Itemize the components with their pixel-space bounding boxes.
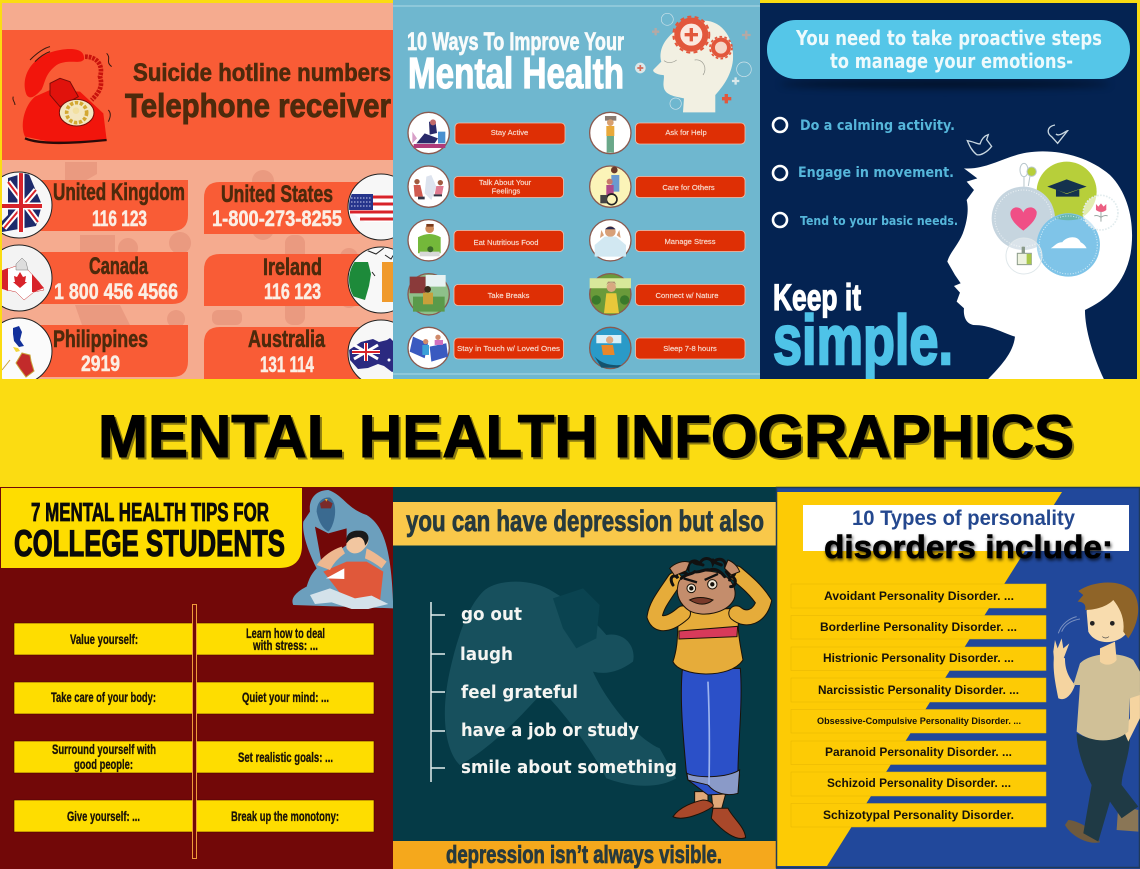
illustration: waving man (1053, 583, 1140, 843)
tips list labels: Feelings (492, 186, 521, 196)
panel: tips for college students (0, 487, 393, 869)
background telephone pattern (65, 162, 358, 328)
tip labels: good people: (74, 756, 133, 772)
heading: simple.: simple. (773, 301, 953, 379)
icon: sleep 7-8 hours (590, 327, 631, 369)
hair curls (671, 559, 735, 587)
card: United States: 1-800-273-8255 (212, 206, 342, 231)
disorder labels (817, 589, 1021, 822)
icon: talk about your feelings (408, 166, 449, 207)
list items: feel grateful (461, 682, 578, 703)
icon: Canada flag map (0, 245, 52, 311)
disorder labels: Paranoid Personality Disorder. ... (825, 745, 1012, 759)
tips list labels: Talk About Your (479, 178, 532, 187)
header band (2, 30, 393, 160)
disorder labels: Histrionic Personality Disorder. ... (823, 651, 1014, 665)
footer text: depression isn’t always visible. (446, 841, 722, 869)
bullet: movement: Engage in movement. (798, 165, 954, 181)
icon: head with gears (635, 13, 751, 112)
tips list labels: Eat Nutritious Food (474, 238, 538, 247)
icon: stay active (408, 112, 449, 154)
card: United Kingdom: 116 123 (92, 206, 147, 231)
icon: Ireland map (348, 246, 393, 314)
card: Philippines (40, 325, 188, 377)
tip labels: Learn how to deal (246, 625, 325, 641)
disorder labels: Obsessive-Compulsive Personality Disorder. ... (817, 716, 1021, 727)
bottom band (393, 841, 776, 869)
icon: US flag map (348, 174, 393, 240)
banner title (0, 379, 1140, 487)
icon: red rotary telephone (13, 47, 112, 143)
card: Australia (204, 326, 360, 380)
panel: suicide hotline numbers (0, 3, 415, 386)
panel: proactive steps to manage emotions (760, 3, 1137, 379)
heading: 10 types of personality: 10 Types of personality (852, 507, 1075, 530)
icon: cloud circle (1037, 213, 1100, 277)
panel: depression isn't always visible (393, 487, 776, 869)
list connector (431, 602, 445, 782)
frame (776, 488, 1140, 868)
heading: 7 mental health tips for: 7 MENTAL HEALTH TIPS FOR (31, 497, 269, 527)
icon: connect with nature (590, 274, 631, 315)
card: Australia: 131 114 (260, 352, 315, 377)
header tab (1, 488, 302, 568)
tips list labels: Stay in Touch w/ Loved Ones (457, 344, 560, 353)
icon: care for others (590, 166, 631, 207)
panel: 10 types of personality disorders (776, 487, 1140, 869)
icon: Philippines map (0, 318, 52, 384)
tips list labels: Stay Active (491, 128, 528, 137)
tip labels: Take care of your body: (51, 689, 156, 705)
disorder labels: Schizoid Personality Disorder. ... (827, 776, 1011, 790)
header pill shadow (780, 80, 1110, 88)
tip labels (51, 625, 339, 824)
header pill (767, 20, 1130, 79)
tips list labels: Ask for Help (665, 128, 707, 137)
tip labels: Quiet your mind: ... (242, 689, 329, 705)
icon: thumbs up (1006, 238, 1042, 274)
list items: go out (461, 604, 522, 625)
card: Ireland (204, 254, 360, 306)
yellow diagonal background (777, 492, 1062, 866)
header pill: to manage your emotions- (830, 49, 1073, 73)
card: Ireland: 116 123 (264, 279, 321, 304)
illustration: stressed student with shadow (292, 490, 393, 609)
icon: UK flag map (0, 172, 52, 238)
bullet: calming activity: Do a calming activity. (800, 118, 955, 134)
card: United Kingdom (40, 179, 188, 231)
heading: disorders include: disorders include: (824, 529, 1113, 565)
illustration: worried boy (655, 559, 764, 839)
tips list labels: Take Breaks (488, 291, 530, 300)
card: Canada (40, 252, 188, 304)
icon: stay in touch (408, 327, 449, 369)
tips list labels: Connect w/ Nature (656, 291, 718, 300)
heading: keep it: Keep it (773, 277, 861, 318)
card: Canada: Canada (89, 253, 148, 280)
tips list icons (408, 112, 631, 369)
tips list labels: Sleep 7-8 hours (663, 344, 717, 353)
card: United States (204, 181, 360, 234)
tip rows (14, 623, 374, 832)
disorder rows (791, 584, 1046, 827)
center divider (192, 604, 196, 858)
list items: smile about something (461, 757, 677, 778)
icon: manage stress (590, 220, 631, 261)
icon: take breaks (408, 274, 449, 315)
card: Philippines: 2919 (81, 351, 120, 376)
card: Ireland: Ireland (263, 254, 322, 281)
header white box (803, 505, 1129, 551)
tips list labels: Manage Stress (664, 237, 716, 246)
list items: have a job or study (461, 720, 639, 741)
tip labels: Value yourself: (70, 631, 138, 647)
list items (460, 604, 677, 778)
heading: college students: COLLEGE STUDENTS (14, 523, 285, 564)
icon: bird (967, 135, 992, 155)
tip labels: Give yourself: ... (67, 808, 140, 824)
icon: heart circle (992, 187, 1055, 250)
card: Canada: 1 800 456 4566 (54, 279, 178, 304)
tips list labels: Care for Others (662, 183, 715, 192)
card: United Kingdom: United Kingdom (53, 179, 185, 206)
banner title: MENTAL HEALTH INFOGRAPHICS (100, 405, 1076, 472)
list items: laugh (460, 644, 513, 665)
heading: telephone receiver: Telephone receiver (125, 87, 391, 124)
tips list labels (457, 128, 718, 353)
disorder labels: Narcissistic Personality Disorder. ... (818, 683, 1019, 697)
panel: 10 ways to improve your mental health (393, 0, 760, 379)
icon: balloons (1020, 163, 1036, 187)
card: Australia: Australia (248, 326, 325, 353)
icon: heart outline (1048, 125, 1068, 143)
icon: ask for help (590, 112, 631, 154)
card: Philippines: Philippines (53, 326, 148, 353)
top band (393, 502, 776, 546)
banner title: MENTAL HEALTH INFOGRAPHICS (98, 403, 1074, 470)
tips list buttons (454, 123, 745, 359)
icon: flower gear (1083, 195, 1118, 230)
disorder labels: Borderline Personality Disorder. ... (820, 620, 1017, 634)
heading: mental health: Mental Health (408, 49, 624, 98)
disorder labels: Schizotypal Personality Disorder. (823, 808, 1014, 822)
tip labels: with stress: ... (252, 637, 318, 653)
tip labels: Set realistic goals: ... (238, 749, 333, 765)
disorder labels: Avoidant Personality Disorder. ... (824, 589, 1014, 603)
card: United States: United States (221, 181, 333, 208)
icon: eat nutritious food (408, 220, 449, 261)
icon: Australia flag map (348, 320, 393, 379)
heading: suicide hotline numbers: Suicide hotline numbers (133, 59, 391, 87)
tip labels: Break up the monotony: (231, 808, 339, 824)
illustration: child head silhouette (947, 125, 1132, 379)
icon: graduation cap circle (1037, 162, 1097, 222)
ghost figure background (445, 582, 676, 786)
heading: you can have depression but also: you can have depression but also (406, 505, 764, 538)
bullet: basic needs: Tend to your basic needs. (800, 213, 958, 228)
tip labels: Surround yourself with (52, 741, 156, 757)
heading: 10 ways to improve your: 10 Ways To Improve Your (407, 28, 624, 56)
